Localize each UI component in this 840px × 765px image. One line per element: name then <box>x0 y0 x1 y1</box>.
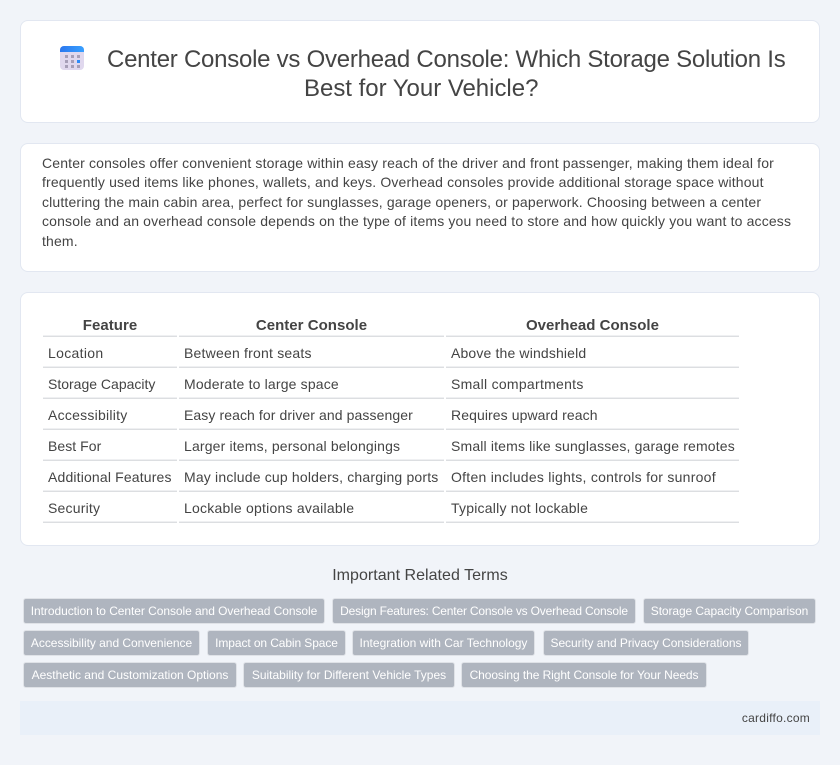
intro text: Center consoles offer convenient storage within easy reach of the driver and front passenger, making them ideal for <box>42 154 774 170</box>
tags: related terms: Storage Capacity Comparison <box>651 604 808 618</box>
tags: related terms: Suitability for Different Vehicle Types <box>252 668 446 682</box>
tags: related terms: Integration with Car Technology <box>360 636 527 650</box>
comparison table: Accessibility <box>48 407 128 423</box>
intro text: frequently used items like phones, wallets, and keys. Overhead consoles provide additional storage space without <box>42 174 764 190</box>
comparison table: Above the windshield <box>451 345 586 361</box>
comparison table: Small compartments <box>451 376 584 392</box>
comparison table: Security <box>48 500 100 516</box>
panel: header <box>20 20 820 123</box>
comparison table: Easy reach for driver and passenger <box>184 407 413 423</box>
icon: calendar <box>60 46 84 70</box>
title: Center Console vs Overhead Console: Which Storage Solution Is <box>107 46 785 73</box>
tags: related terms: Aesthetic and Customization Options <box>32 668 228 682</box>
panel: comparison table <box>20 292 820 546</box>
intro text: them. <box>42 233 78 249</box>
tags: related terms: Security and Privacy Considerations <box>550 636 742 650</box>
comparison table: Center Console <box>256 317 367 334</box>
title <box>107 46 785 102</box>
comparison table: May include cup holders, charging ports <box>184 469 438 485</box>
heading: related terms: Important Related Terms <box>332 567 508 584</box>
comparison table: Larger items, personal belongings <box>184 438 400 454</box>
tags: related terms: Choosing the Right Console for Your Needs <box>470 668 698 682</box>
intro text: console and an overhead console depends on the type of items you need to store and how quickly you want to access <box>42 213 791 229</box>
comparison table: Often includes lights, controls for sunroof <box>451 469 716 485</box>
comparison table: Moderate to large space <box>184 376 339 392</box>
comparison table: Best For <box>48 438 101 454</box>
comparison table: Feature <box>83 317 137 334</box>
footer credit: cardiffo.com <box>742 711 810 725</box>
comparison table <box>43 317 739 523</box>
comparison table: Lockable options available <box>184 500 354 516</box>
tags: related terms: Design Features: Center Console vs Overhead Console <box>340 604 628 618</box>
intro text <box>42 154 791 249</box>
intro text: cluttering the main cabin area, perfect for sunglasses, garage openers, or paperwork. Choosing between a center <box>42 194 761 210</box>
comparison table: Typically not lockable <box>451 500 588 516</box>
comparison table: Between front seats <box>184 345 312 361</box>
panel: introduction <box>20 143 820 272</box>
comparison table: Small items like sunglasses, garage remotes <box>451 438 735 454</box>
tags: related terms: Introduction to Center Console and Overhead Console <box>31 604 317 618</box>
comparison table: Overhead Console <box>526 317 659 334</box>
title: Best for Your Vehicle? <box>304 75 538 102</box>
comparison table: Storage Capacity <box>48 376 155 392</box>
footer <box>20 701 820 735</box>
comparison table: Requires upward reach <box>451 407 598 423</box>
tags: related terms: Accessibility and Convenience <box>31 636 192 650</box>
tags: related terms: Impact on Cabin Space <box>215 636 338 650</box>
tags: related terms <box>23 598 816 688</box>
comparison table: Additional Features <box>48 469 172 485</box>
comparison table: Location <box>48 345 104 361</box>
